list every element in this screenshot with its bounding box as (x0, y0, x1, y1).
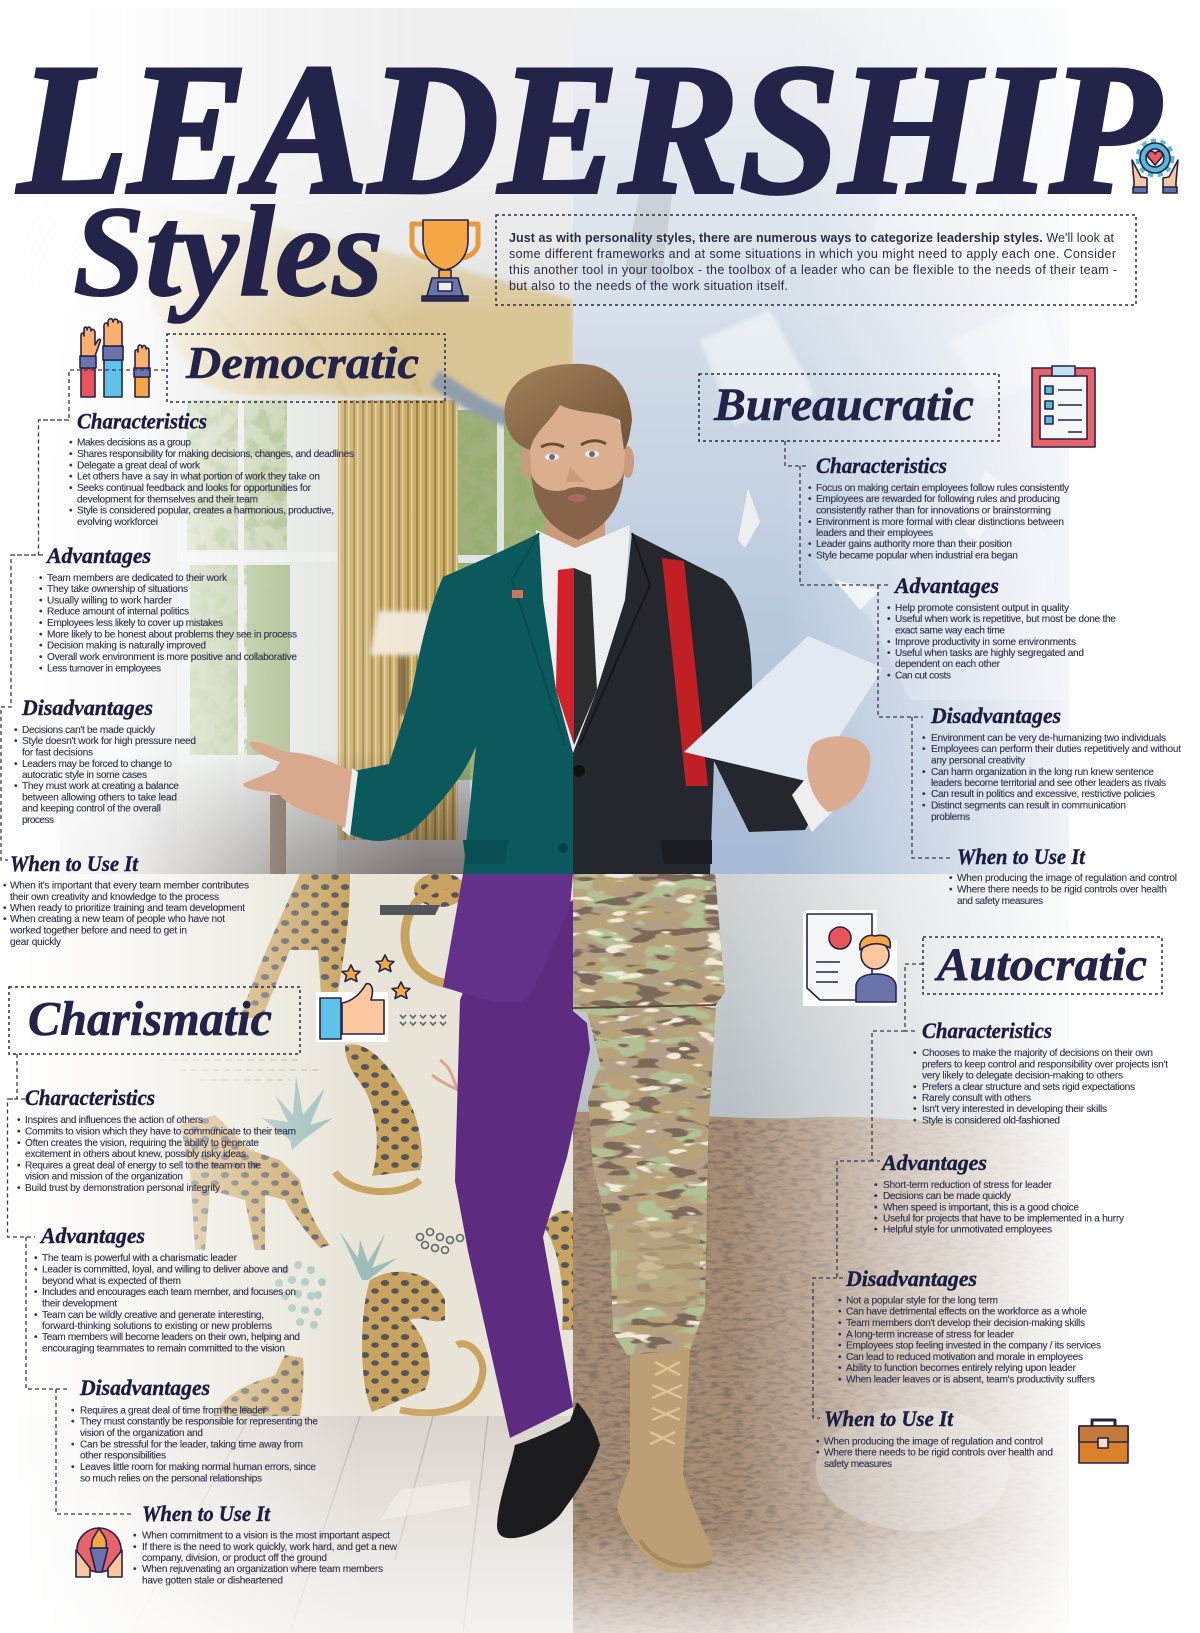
list: characteristics: Style became popular when industrial era began (816, 550, 1018, 562)
list: advantages: Improve productivity in some environments (895, 637, 1076, 648)
jacket details: lapels, flaps, buttons, flag pin (463, 533, 712, 864)
heading box: Bureaucratic: Bureaucratic (713, 379, 974, 431)
subheading: When to Use It: When to Use It (824, 1406, 954, 1431)
list: characteristics: • (17, 1115, 21, 1126)
list: advantages: Useful when work is repetitive, but most be done the (895, 614, 1116, 625)
connector line (813, 964, 923, 1418)
list: disadvantages: other responsibilities (80, 1450, 166, 1462)
panel: Democratic (1, 319, 445, 948)
list: advantages: Can cut costs (895, 670, 951, 682)
list: when to use it (816, 1436, 1053, 1470)
list: advantages: Leader is committed, loyal, and willing to deliver above and (42, 1264, 288, 1276)
list: disadvantages: • (838, 1330, 842, 1340)
callout: introduction box (496, 215, 1136, 305)
list: characteristics: Style is considered old-fashioned (922, 1116, 1060, 1126)
list: disadvantages: Can harm organization in the long run knew sentence (931, 767, 1154, 778)
list: advantages: their development (42, 1298, 117, 1310)
list: disadvantages: so much relies on the personal relationships (80, 1474, 262, 1484)
callout: introduction box: Just as with personality styles, there are numerous ways to categorize leadership styles. We'll look at (509, 231, 1115, 245)
list: advantages: When speed is important, this is a good choice (883, 1202, 1079, 1214)
list: disadvantages: any personal creativity (931, 756, 1026, 766)
heading box: Democratic: Democratic (185, 337, 419, 388)
list: disadvantages: • (71, 1406, 75, 1416)
figure: split-costume man (243, 364, 883, 1573)
list: characteristics: • (17, 1126, 21, 1138)
background: leopard wallpaper quadrant (84, 874, 573, 1633)
list: when to use it: When producing the image of regulation and control (957, 873, 1177, 884)
list: characteristics: Inspires and influences the action of others (25, 1115, 203, 1126)
list: when to use it: company, division, or product off the ground (142, 1553, 327, 1564)
list: when to use it: • (816, 1448, 820, 1458)
list: disadvantages: Ability to function becomes entirely relying upon leader (846, 1363, 1077, 1374)
list: disadvantages: • (838, 1374, 842, 1386)
list: disadvantages: • (838, 1318, 842, 1329)
list: characteristics: • (69, 483, 73, 494)
list: characteristics: Delegate a great deal of work (77, 460, 201, 472)
list: disadvantages: Can be stressful for the leader, taking time away from (80, 1440, 303, 1450)
list: characteristics: development for themselves and their team (77, 494, 258, 506)
list: advantages: forward-thinking solutions to existing or new problems (42, 1321, 272, 1332)
list: characteristics: Let others have a say in what portion of work they take on (77, 472, 320, 482)
list: disadvantages (71, 1406, 318, 1484)
list: when to use it (3, 880, 249, 948)
subheading: Disadvantages: Disadvantages (79, 1375, 210, 1400)
list: advantages: dependent on each other (895, 659, 1001, 670)
subheading: Disadvantages: Disadvantages (845, 1266, 977, 1291)
list: characteristics: excitement in others about knew, possibly risky ideas (25, 1149, 246, 1160)
list: advantages: Useful for projects that have to be implemented in a hurry (883, 1214, 1125, 1224)
list: characteristics: leaders and their employees (816, 528, 933, 539)
list: characteristics: • (913, 1104, 917, 1115)
list: characteristics: • (808, 539, 812, 550)
list: disadvantages: • (922, 744, 926, 755)
list: advantages: • (887, 648, 891, 659)
list: characteristics (808, 483, 1070, 562)
list: characteristics: Isn't very interested in developing their skills (922, 1104, 1107, 1115)
teal jacket half (350, 533, 573, 874)
panel: Bureaucratic (699, 366, 1181, 907)
list: characteristics: • (913, 1082, 917, 1093)
list: advantages: • (39, 664, 43, 674)
list: advantages: Usually willing to work harder (47, 596, 173, 606)
list: when to use it: When it's important that every team member contributes (10, 880, 249, 892)
list: characteristics: Makes decisions as a group (77, 438, 191, 448)
list: characteristics: Seeks continual feedback and looks for opportunities for (77, 483, 312, 494)
list: advantages: Team members are dedicated to their work (47, 573, 228, 584)
list: when to use it: gear quickly (10, 937, 62, 948)
list: characteristics: very likely to delegate decision-making to others (922, 1070, 1123, 1082)
list: advantages: • (39, 652, 43, 663)
subheading: When to Use It: When to Use It (142, 1501, 271, 1526)
list: advantages: • (39, 630, 43, 640)
list: characteristics: Chooses to make the majority of decisions on their own (922, 1048, 1153, 1059)
list: characteristics: • (69, 449, 73, 460)
list: advantages (39, 573, 297, 674)
head (504, 364, 634, 540)
list: when to use it: If there is the need to work quickly, work hard, and get a new (142, 1542, 398, 1553)
list: disadvantages: • (922, 800, 926, 812)
list: when to use it: When rejuvenating an organization where team members (142, 1564, 383, 1575)
list: when to use it: • (3, 914, 7, 925)
list: disadvantages: Leaders may be forced to change to (22, 759, 172, 770)
list: advantages: They take ownership of situations (47, 584, 188, 595)
list: characteristics: prefers to keep control and responsibility over projects isn't (922, 1060, 1168, 1070)
list: advantages: Overall work environment is more positive and collaborative (47, 652, 297, 663)
list: disadvantages: • (922, 733, 926, 744)
list: advantages: • (887, 614, 891, 625)
list: characteristics: Requires a great deal of energy to sell to the team on the (25, 1160, 261, 1172)
list: advantages: beyond what is expected of them (42, 1276, 181, 1287)
heading box: Charismatic (9, 987, 300, 1054)
list: advantages: Useful when tasks are highly segregated and (895, 648, 1084, 659)
list: disadvantages: Can have detrimental effects on the workforce as a whole (846, 1306, 1087, 1318)
list: when to use it: • (949, 873, 953, 884)
list: characteristics: • (913, 1116, 917, 1126)
list: disadvantages: A long-term increase of stress for leader (846, 1330, 1015, 1340)
connector line (785, 441, 950, 858)
red strap (662, 558, 708, 786)
list: advantages: • (874, 1214, 878, 1224)
subtitle: Styles: Styles (73, 180, 383, 324)
list: when to use it: • (3, 903, 7, 914)
list: advantages: The team is powerful with a charismatic leader (42, 1253, 238, 1264)
list: advantages: • (39, 640, 43, 652)
list: disadvantages: • (838, 1296, 842, 1306)
list: advantages: • (39, 618, 43, 629)
icon: hands holding torch (76, 1528, 122, 1577)
list: advantages: Less turnover in employees (47, 664, 161, 674)
list: characteristics: • (808, 483, 812, 494)
list: characteristics: • (913, 1093, 917, 1104)
list: characteristics: Focus on making certain employees follow rules consistently (816, 483, 1070, 494)
list: characteristics: Often creates the vision, requiring the ability to generate (25, 1138, 259, 1149)
list: advantages: • (887, 637, 891, 648)
black shoe (497, 1402, 600, 1538)
connector line (1, 370, 165, 860)
list: disadvantages: autocratic style in some cases (22, 770, 147, 781)
heading box: Autocratic: Autocratic (934, 939, 1147, 991)
heading box: Bureaucratic (699, 374, 999, 441)
list: disadvantages: • (838, 1306, 842, 1318)
list: disadvantages: Team members don't develop their decision-making skills (846, 1318, 1085, 1329)
list: disadvantages: and keeping control of the overall (22, 804, 161, 814)
list: advantages (34, 1253, 300, 1354)
list: advantages: • (874, 1202, 878, 1214)
list: disadvantages: They must constantly be responsible for representing the (80, 1416, 318, 1428)
dark jacket half (573, 533, 825, 874)
sheet of paper (684, 636, 883, 782)
list: advantages: Reduce amount of internal politics (47, 606, 189, 618)
list: characteristics (69, 438, 354, 528)
list: disadvantages: • (838, 1363, 842, 1374)
camouflage trousers (573, 874, 733, 1364)
list: disadvantages: • (14, 736, 18, 747)
list: characteristics: Prefers a clear structure and sets rigid expectations (922, 1082, 1135, 1093)
subheading: When to Use It: When to Use It (957, 844, 1086, 869)
list: advantages: Team can be wildly creative and generate interesting, (42, 1310, 264, 1321)
list: disadvantages: Can lead to reduced motivation and morale in employees (846, 1352, 1083, 1363)
list: when to use it: • (949, 884, 953, 896)
list: when to use it (133, 1530, 398, 1586)
list: when to use it: have gotten stale or disheartened (142, 1576, 283, 1586)
callout: introduction box: some different frameworks and at some situations in which you might need to apply each one. Consider (509, 247, 1116, 261)
list: disadvantages: Style doesn't work for high pressure need (22, 736, 196, 747)
list: characteristics: • (913, 1048, 917, 1059)
subheading: Disadvantages: Disadvantages (930, 703, 1061, 728)
list: characteristics: Environment is more formal with clear distinctions between (816, 517, 1064, 528)
list: characteristics (17, 1115, 296, 1194)
subheading: Advantages: Advantages (893, 573, 999, 598)
list: disadvantages: Not a popular style for the long term (846, 1296, 998, 1306)
list: when to use it: their own creativity and knowledge to the process (10, 892, 219, 903)
list: disadvantages: • (14, 759, 18, 770)
list: disadvantages: Leaves little room for making normal human errors, since (80, 1462, 316, 1473)
background: office quadrant with flying papers (573, 8, 1069, 874)
list: advantages (887, 603, 1116, 682)
neck (545, 505, 605, 550)
list: characteristics: consistently rather than for innovations or brainstorming (816, 506, 1051, 516)
right hand (807, 736, 870, 812)
list: when to use it: Where there needs to be rigid controls over health (957, 884, 1167, 896)
list: characteristics: • (17, 1183, 21, 1194)
list: disadvantages: between allowing others to take lead (22, 792, 177, 804)
list: characteristics: • (808, 494, 812, 505)
purple trouser leg and jacket hem (443, 874, 590, 1438)
title: LEADERSHIP: LEADERSHIP (16, 26, 1162, 233)
list: characteristics (913, 1048, 1168, 1126)
list: advantages: • (39, 573, 43, 584)
icon: clipboard checklist (1032, 366, 1095, 447)
list: disadvantages (14, 725, 196, 826)
list: disadvantages: • (922, 767, 926, 778)
list: advantages: • (887, 603, 891, 614)
list: disadvantages: • (71, 1416, 75, 1428)
subheading: Characteristics: Characteristics (25, 1085, 155, 1110)
list: disadvantages: • (14, 781, 18, 792)
list: when to use it: When ready to prioritize training and team development (10, 903, 245, 914)
callout: introduction box: but also to the needs of the work situation itself. (509, 279, 788, 293)
list: characteristics: • (808, 517, 812, 528)
list: advantages (874, 1180, 1125, 1236)
list: disadvantages: process (22, 815, 54, 826)
list: advantages: exact same way each time (895, 626, 1005, 636)
list: advantages: Short-term reduction of stress for leader (883, 1180, 1053, 1191)
list: disadvantages: problems (931, 812, 970, 823)
list: when to use it: When commitment to a vision is the most important aspect (142, 1530, 390, 1542)
list: advantages: Help promote consistent output in quality (895, 603, 1070, 614)
list: characteristics: Employees are rewarded for following rules and producing (816, 494, 1060, 505)
subheading: Characteristics: Characteristics (77, 408, 207, 434)
list: advantages: • (874, 1191, 878, 1202)
list: advantages: • (39, 606, 43, 618)
list: characteristics: • (17, 1160, 21, 1172)
list: characteristics: Style is considered popular, creates a harmonious, productive, (77, 506, 334, 516)
list: advantages: • (34, 1332, 38, 1343)
subheading: When to Use It: When to Use It (10, 851, 139, 876)
list: disadvantages: Requires a great deal of time from the leader (80, 1406, 267, 1416)
list: characteristics: • (69, 472, 73, 482)
list: disadvantages: Can result in politics and excessive, restrictive policies (931, 789, 1155, 800)
list: when to use it (949, 873, 1177, 907)
list: advantages: • (34, 1253, 38, 1264)
icon: hands with heart gear (1132, 141, 1178, 193)
list: characteristics: • (69, 438, 73, 448)
background: battlefield quadrant (573, 874, 1069, 1633)
list: characteristics: Shares responsibility for making decisions, changes, and deadlines (77, 449, 354, 460)
list: disadvantages: When leader leaves or is absent, team's productivity suffers (846, 1374, 1095, 1386)
list: when to use it: • (816, 1436, 820, 1448)
subheading: Advantages: Advantages (880, 1150, 987, 1175)
left shirt cuff (342, 768, 358, 836)
list: disadvantages (838, 1296, 1101, 1386)
list: when to use it: When creating a new team of people who have not (10, 914, 225, 925)
icon: target document with manager (803, 910, 897, 1006)
list: advantages: • (34, 1310, 38, 1321)
list: advantages: More likely to be honest about problems they see in process (47, 630, 297, 640)
list: disadvantages: leaders become territorial and see other leaders as rivals (931, 778, 1166, 789)
list: when to use it: worked together before and need to get in (9, 926, 187, 936)
list: disadvantages: Distinct segments can result in communication (931, 800, 1126, 812)
icon: thumbs up with stars (316, 955, 410, 1042)
list: when to use it: When producing the image of regulation and control (824, 1436, 1043, 1448)
list: disadvantages: • (838, 1340, 842, 1352)
icon: raised hands (80, 319, 150, 397)
list: advantages: • (34, 1264, 38, 1276)
list: disadvantages: They must work at creating a balance (22, 781, 179, 792)
list: characteristics: evolving workforcei (77, 517, 158, 528)
list: when to use it: safety measures (824, 1459, 892, 1470)
icon: briefcase (1079, 1420, 1128, 1463)
list: disadvantages (922, 733, 1181, 823)
list: advantages: Employees less likely to cover up mistakes (47, 618, 223, 629)
list: disadvantages: for fast decisions (22, 748, 93, 758)
list: advantages: • (887, 670, 891, 682)
list: when to use it: • (3, 880, 7, 892)
connector line (8, 1054, 133, 1514)
tie (556, 568, 597, 745)
list: advantages: Includes and encourages each team member, and focuses on (42, 1287, 296, 1298)
list: advantages: • (874, 1224, 878, 1236)
heading box: Democratic (167, 334, 445, 402)
list: advantages: Decision making is naturally improved (47, 640, 206, 652)
list: characteristics: Leader gains authority more than their position (816, 539, 1012, 550)
list: disadvantages: • (838, 1352, 842, 1363)
list: disadvantages: • (71, 1462, 75, 1473)
subheading: Disadvantages: Disadvantages (21, 695, 153, 720)
white shirt (536, 525, 630, 755)
list: characteristics: vision and mission of the organization (25, 1172, 183, 1182)
list: disadvantages: Decisions can't be made quickly (22, 725, 156, 736)
subheading: Advantages: Advantages (39, 1223, 145, 1248)
background: room quadrant (62, 8, 573, 874)
list: characteristics: Build trust by demonstration personal integrity (25, 1183, 221, 1194)
heading box: Charismatic: Charismatic (28, 991, 272, 1046)
list: characteristics: • (69, 506, 73, 516)
list: advantages: Decisions can be made quickly (883, 1191, 1012, 1202)
icon: trophy (412, 220, 478, 301)
right shirt cuff (792, 778, 832, 832)
list: advantages: • (34, 1287, 38, 1298)
left open hand (243, 742, 352, 828)
list: disadvantages: • (922, 789, 926, 800)
list: when to use it: and safety measures (957, 896, 1043, 907)
subheading: Characteristics: Characteristics (922, 1018, 1052, 1043)
list: advantages: • (39, 584, 43, 595)
subheading: Characteristics: Characteristics (816, 453, 947, 478)
list: characteristics: • (69, 460, 73, 472)
panel: Autocratic (803, 910, 1168, 1470)
list: disadvantages: Employees can perform their duties repetitively and without (931, 744, 1181, 755)
list: characteristics: • (17, 1138, 21, 1149)
subheading: Advantages: Advantages (45, 543, 151, 568)
list: when to use it: • (133, 1564, 137, 1575)
list: advantages: • (39, 596, 43, 606)
list: disadvantages: Environment can be very de-humanizing two individuals (931, 733, 1166, 744)
list: characteristics: • (808, 550, 812, 562)
list: advantages: Team members will become leaders on their own, helping and (42, 1332, 300, 1343)
list: when to use it: • (133, 1542, 137, 1553)
list: advantages: • (874, 1180, 878, 1191)
list: characteristics: Rarely consult with others (922, 1093, 1031, 1104)
tan combat boot (617, 1350, 713, 1573)
list: advantages: encouraging teammates to remain committed to the vision (42, 1344, 285, 1354)
list: characteristics: Commits to vision which they have to communicate to their team (25, 1126, 296, 1138)
list: disadvantages: • (71, 1440, 75, 1450)
panel: Charismatic (8, 955, 410, 1586)
list: advantages: Helpful style for unmotivated employees (883, 1224, 1052, 1236)
list: disadvantages: vision of the organization and (80, 1428, 203, 1439)
list: when to use it: Where there needs to be rigid controls over health and (824, 1448, 1053, 1458)
list: disadvantages: • (14, 725, 18, 736)
list: when to use it: • (133, 1530, 137, 1542)
callout: introduction box: this another tool in your toolbox - the toolbox of a leader who can be flexible to the needs of their team - (509, 263, 1117, 277)
list: disadvantages: Employees stop feeling invested in the company / its services (846, 1340, 1101, 1352)
